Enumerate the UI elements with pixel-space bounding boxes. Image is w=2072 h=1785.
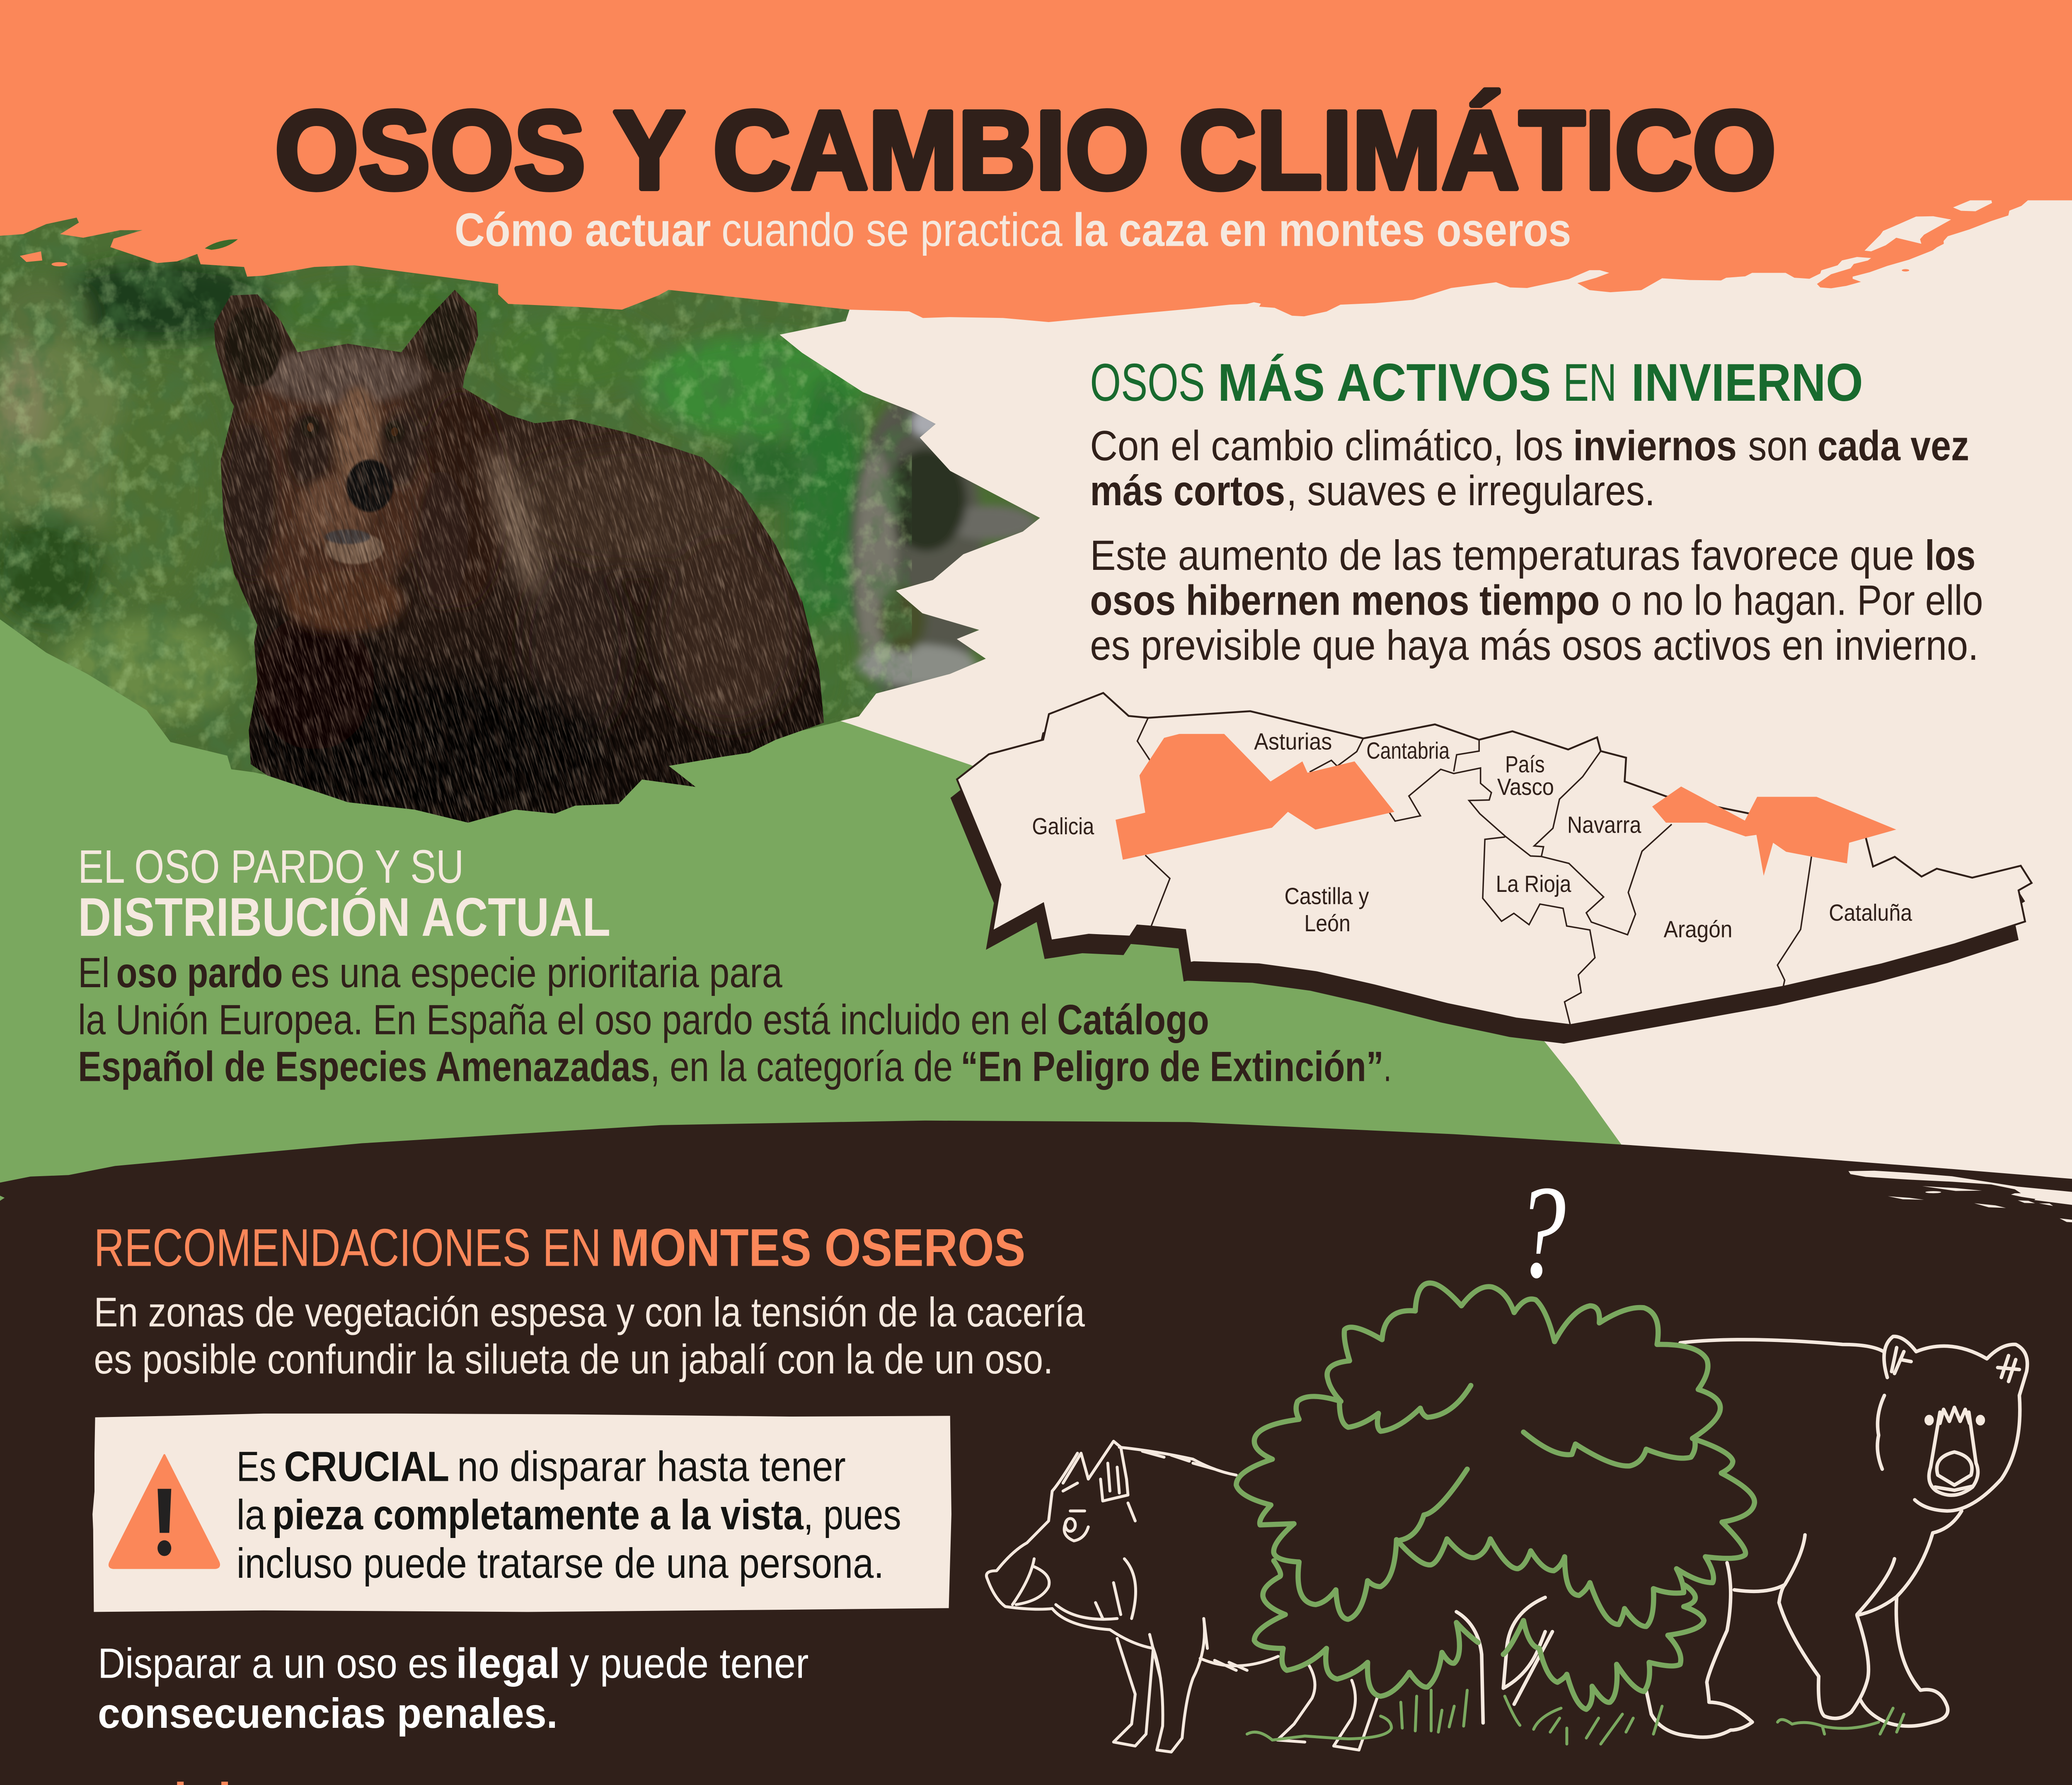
region borders — [1137, 718, 1811, 1025]
callout text: incluso puede tratarse de una persona. — [237, 1540, 884, 1587]
text block: brown bear status: “En Peligro de Extinción” — [961, 1043, 1384, 1090]
text block: brown bear status: la Unión Europea. En España el oso pardo está incluido en el — [78, 996, 1048, 1044]
icon: question mark: ? — [1516, 1158, 1566, 1305]
panel: orange title band — [0, 0, 2072, 322]
text block: brown bear status: Español de Especies Amenazadas — [78, 1043, 650, 1090]
map land — [957, 693, 2032, 1025]
map labels: León — [1304, 911, 1351, 937]
callout text: no disparar hasta tener — [457, 1443, 846, 1490]
map labels: La Rioja — [1496, 871, 1571, 897]
text block: winters paragraph: son — [1748, 422, 1808, 470]
boar line art — [986, 1441, 1377, 1752]
text block: illegal to shoot: consecuencias penales. — [98, 1690, 558, 1737]
map shadow — [951, 712, 2025, 1044]
text block: confusion warning: es posible confundir la silueta de un jabalí con la de un oso. — [94, 1336, 1053, 1382]
text block: brown bear status: , en la categoría de — [650, 1043, 953, 1090]
text block: confusion warning — [94, 1289, 1085, 1382]
text block: brown bear status — [78, 949, 1392, 1090]
callout text: , pues — [804, 1492, 901, 1539]
callout text: la — [237, 1492, 266, 1539]
map labels: Vasco — [1497, 774, 1554, 800]
text block: confusion warning: En zonas de vegetación espesa y con la tensión de la cacería — [94, 1289, 1085, 1335]
illustration: boar, bush and bear — [986, 1283, 2027, 1752]
map labels: Castilla y — [1284, 883, 1369, 909]
panel: dark recommendations section — [0, 1121, 2072, 1785]
heading: recomendaciones en montes oseros — [94, 1218, 1025, 1277]
icon: warning triangle — [109, 1455, 219, 1568]
green speck at left edge — [0, 1196, 5, 1201]
text block: illegal to shoot — [98, 1640, 809, 1737]
callout text: CRUCIAL — [284, 1443, 449, 1490]
callout: crucial — [92, 1414, 951, 1612]
text block: brown bear status: . — [1384, 1043, 1392, 1090]
text block: winters paragraph: cada vez — [1818, 422, 1969, 470]
orange and green brush specks over photo — [20, 239, 238, 266]
text block: winters paragraph: , suaves e irregulares. — [1286, 467, 1655, 514]
text block: illegal to shoot: Disparar a un oso es — [98, 1640, 448, 1687]
bear range: west — [1116, 734, 1394, 860]
heading: recomendaciones en montes oseros: RECOMENDACIONES EN — [94, 1218, 601, 1277]
text block: winters paragraph: Con el cambio climático, los — [1090, 422, 1563, 470]
text block: winters paragraph: Este aumento de las temperaturas favorece que — [1090, 532, 1914, 579]
heading: el oso pardo y su distribución actual — [78, 840, 610, 948]
map labels: Cataluña — [1829, 900, 1912, 926]
bear line art — [1456, 1337, 2027, 1737]
heading: osos más activos en invierno: EN — [1563, 353, 1617, 412]
callout text: pieza completamente a la vista — [272, 1492, 804, 1539]
bear range: east — [1652, 787, 1896, 876]
text block: illegal to shoot: ilegal — [456, 1640, 560, 1687]
title: OSOS Y CAMBIO CLIMÁTICO — [275, 88, 1776, 212]
map labels: País — [1505, 751, 1545, 777]
text block: winters paragraph: más cortos — [1090, 467, 1285, 514]
text block: brown bear status: El — [78, 949, 110, 997]
text block: brown bear status: oso pardo — [116, 949, 283, 997]
text block: winters paragraph: es previsible que haya más osos activos en invierno. — [1090, 622, 1979, 669]
brush marks at top right of dark section — [1848, 1171, 2072, 1222]
text block: brown bear status: Catálogo — [1057, 996, 1209, 1044]
map labels: Asturias — [1254, 729, 1332, 755]
subtitle: la caza en montes oseros — [1073, 203, 1571, 256]
map labels: Galicia — [1032, 814, 1094, 840]
map of northern Spain — [951, 693, 2032, 1044]
heading: osos más activos en invierno: OSOS — [1090, 353, 1205, 412]
heading: recomendaciones en montes oseros: MONTES OSEROS — [610, 1218, 1025, 1277]
text block: winters paragraph: osos hibernen menos tiempo — [1090, 577, 1600, 624]
bear photograph — [0, 218, 1040, 775]
heading: el oso pardo y su distribución actual: EL OSO PARDO Y SU — [78, 840, 464, 893]
grass line art — [1247, 1690, 1904, 1744]
bush line art — [1236, 1283, 1755, 1710]
text block: winters paragraph: los — [1925, 532, 1975, 579]
callout text: Es — [237, 1443, 276, 1490]
subtitle — [455, 203, 1571, 256]
text block: winters paragraph: inviernos — [1573, 422, 1737, 470]
text block: winters paragraph: o no lo hagan. Por ello — [1611, 577, 1983, 624]
subtitle: Cómo actuar — [455, 203, 711, 256]
panel: green distribution background — [0, 605, 1628, 1196]
heading: el oso pardo y su distribución actual: DISTRIBUCIÓN ACTUAL — [78, 887, 610, 948]
map labels: Navarra — [1567, 812, 1641, 838]
map labels: Cantabria — [1366, 738, 1450, 764]
cream brush marks in band — [1864, 200, 1992, 271]
cropped text marks at bottom edge — [177, 1782, 228, 1785]
text block: illegal to shoot: y puede tener — [569, 1640, 809, 1687]
map labels: Aragón — [1664, 917, 1732, 942]
brown bear — [214, 290, 824, 823]
map labels — [1032, 729, 1912, 942]
heading: osos más activos en invierno — [1090, 353, 1863, 412]
subtitle: cuando se practica — [721, 203, 1063, 256]
text block: brown bear status: es una especie prioritaria para — [291, 949, 782, 997]
callout text — [237, 1443, 901, 1587]
heading: osos más activos en invierno: MÁS ACTIVOS — [1218, 353, 1551, 412]
heading: osos más activos en invierno: INVIERNO — [1631, 353, 1863, 412]
text block: winters paragraph — [1090, 422, 1983, 669]
